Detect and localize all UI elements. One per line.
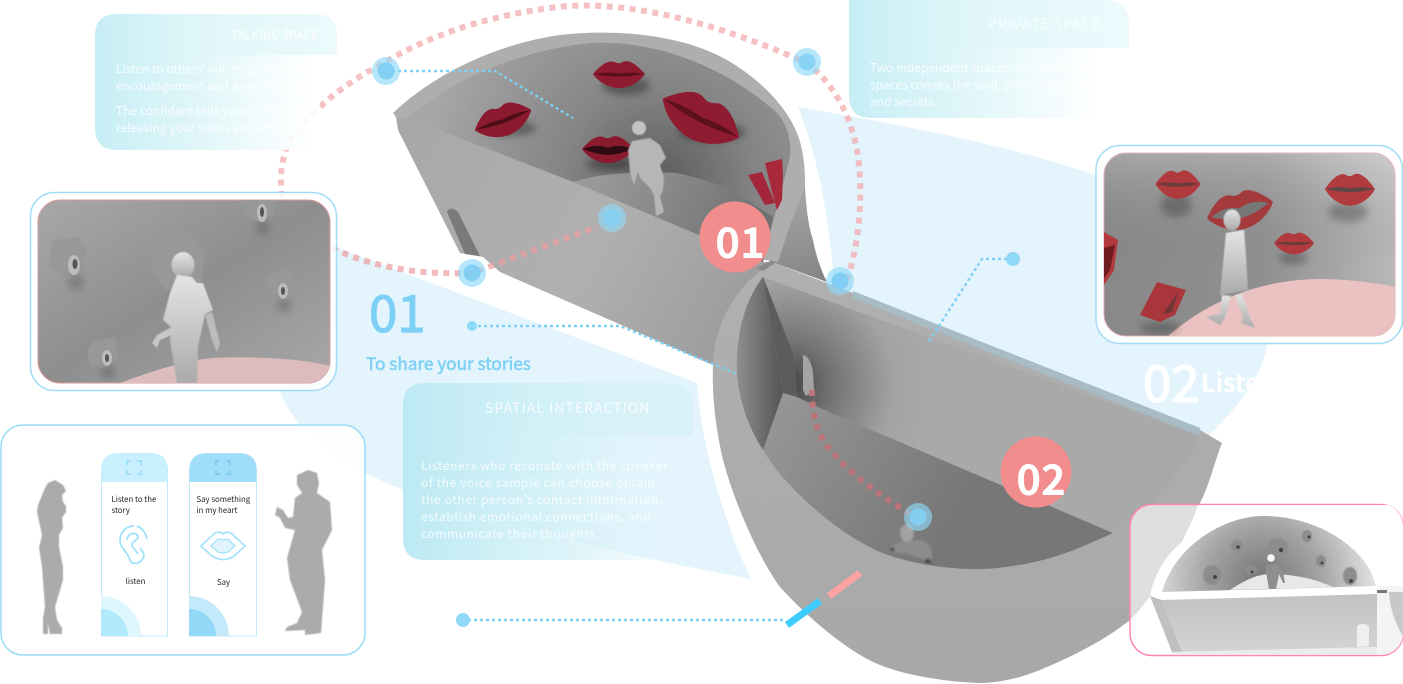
heading: to share your stories: To share your stories bbox=[366, 350, 531, 375]
inset view: pink frame bbox=[1130, 504, 1403, 656]
white outer arch bbox=[1150, 505, 1403, 654]
badge 01 bbox=[700, 202, 770, 272]
scan icon bbox=[127, 461, 141, 474]
marker dots bbox=[372, 48, 932, 531]
ear icon bbox=[120, 526, 147, 563]
lip shadows bbox=[1140, 193, 1368, 334]
silhouette: man bbox=[275, 470, 332, 635]
dotted blue leader: middle bbox=[472, 326, 735, 373]
dotted blue leader: top bbox=[386, 71, 573, 118]
talking space body: Listen to others' voices, gain self-confidence, bbox=[116, 60, 364, 77]
heading number 01: 01 bbox=[369, 273, 426, 347]
private space title: PRIVATE SPACE bbox=[988, 14, 1101, 34]
card label: listen bbox=[126, 576, 146, 587]
lip shadows bbox=[484, 77, 746, 170]
heading: listen: Listen bbox=[1201, 364, 1275, 400]
ear openings bbox=[72, 207, 285, 362]
photo frame: lips wall bbox=[1096, 146, 1402, 344]
upper room inner wall bbox=[408, 43, 790, 262]
blue tinted wall top bbox=[853, 291, 1200, 436]
badge 02 bbox=[1000, 436, 1072, 508]
pink floor bbox=[120, 357, 330, 383]
person bbox=[152, 252, 220, 383]
front wall bbox=[1162, 594, 1377, 652]
upper room rim bbox=[393, 33, 805, 262]
spatial interaction body: of the voice sample can choose obtain bbox=[421, 474, 656, 491]
tick bar: pink bbox=[829, 573, 860, 596]
right curved room bbox=[1377, 586, 1403, 655]
upper room front wall bbox=[396, 117, 772, 365]
card text: in my heart bbox=[196, 505, 238, 516]
card text: Say something bbox=[196, 494, 251, 505]
figure in upper room bbox=[628, 121, 666, 216]
small person bbox=[1265, 554, 1285, 589]
lower room shell bbox=[713, 262, 1222, 683]
scan icon bbox=[216, 461, 230, 474]
photo frame: ears wall bbox=[30, 192, 336, 390]
lower room left wall bbox=[737, 277, 783, 450]
upper room door bbox=[447, 208, 480, 256]
upper room flank bbox=[772, 120, 827, 282]
dashed route inside lower room bbox=[812, 390, 910, 514]
kiosk card: listen bbox=[101, 453, 168, 636]
heading number 02: 02 bbox=[1143, 343, 1200, 417]
person bbox=[1206, 210, 1255, 328]
leader end dots bbox=[456, 252, 1020, 627]
talking space body: releasing your stress and emotions bbox=[116, 119, 310, 136]
floor bbox=[1230, 574, 1333, 590]
dashed pink route: upper loop bbox=[281, 6, 860, 286]
talking space title: TALKING SPACE bbox=[231, 26, 318, 43]
lower room door bbox=[803, 355, 814, 396]
quarter circles bbox=[189, 596, 229, 636]
wall end bbox=[1150, 596, 1182, 652]
door bbox=[1357, 624, 1369, 647]
card header bbox=[190, 454, 256, 482]
quarter circles bbox=[101, 596, 141, 636]
lips on upper wall bbox=[470, 61, 783, 210]
dashed pink route: lower left bbox=[332, 227, 597, 273]
panel: spatial interaction bbox=[403, 383, 693, 560]
dotted blue leader: right bbox=[928, 259, 1013, 343]
ear openings on dome bbox=[1213, 536, 1353, 583]
card text: story bbox=[112, 505, 130, 516]
ear shadows bbox=[68, 221, 291, 379]
figure in lower room bbox=[890, 524, 932, 563]
ears bbox=[68, 204, 288, 366]
spatial interaction body: establish emotional connections, and bbox=[421, 508, 651, 525]
card text: Listen to the bbox=[112, 494, 156, 505]
panel: talking space bbox=[95, 14, 364, 150]
card label: Say bbox=[217, 577, 230, 588]
upper room floor bbox=[573, 172, 773, 262]
badge 01: 01 bbox=[715, 210, 765, 271]
floor strip bbox=[1172, 647, 1377, 655]
red lips bbox=[1104, 170, 1375, 322]
rim junction bbox=[757, 260, 775, 271]
spatial interaction title: SPATIAL INTERACTION bbox=[485, 398, 650, 418]
lower room pier bbox=[763, 277, 797, 397]
ear patches on dome bbox=[1203, 530, 1357, 585]
private space body: spaces convey the soul, protecting your privacy bbox=[870, 76, 1133, 93]
spatial interaction body: the other person's contact information, bbox=[421, 491, 663, 508]
building: 3D model of two half-round rooms bbox=[393, 33, 1222, 683]
private space body: Two independent spaces, enclosed dividing bbox=[870, 59, 1113, 76]
background shape: light blue right speech area bbox=[798, 107, 1267, 437]
ear patches bbox=[52, 200, 276, 362]
panel: kiosk interaction bbox=[1, 425, 365, 676]
panel: private space bbox=[849, 0, 1133, 118]
private space body: and secrets. bbox=[870, 93, 937, 110]
card header bbox=[102, 454, 168, 482]
wall light bbox=[1104, 153, 1395, 336]
kiosk card: say bbox=[189, 453, 257, 636]
pink floor bbox=[1168, 279, 1395, 336]
silhouette: woman bbox=[37, 480, 66, 634]
talking space body: encouragement and a sense of identity bbox=[116, 77, 333, 94]
lower room floor bbox=[763, 393, 1113, 569]
lower room back wall bbox=[763, 277, 1197, 533]
lips icon bbox=[201, 532, 245, 560]
inner dome bbox=[1162, 516, 1376, 592]
badge 02: 02 bbox=[1016, 447, 1066, 508]
spatial interaction body: Listeners who resonate with the speaker bbox=[421, 457, 668, 474]
dotted blue leader: bottom bbox=[462, 619, 785, 621]
talking space body: The confidant tells your story and listens, bbox=[116, 102, 345, 119]
spatial interaction body: communicate their thoughts. bbox=[421, 525, 600, 542]
wall top bbox=[1150, 586, 1377, 600]
tick bar: blue bbox=[787, 601, 820, 625]
background shape: light blue left speech area bbox=[280, 243, 751, 579]
